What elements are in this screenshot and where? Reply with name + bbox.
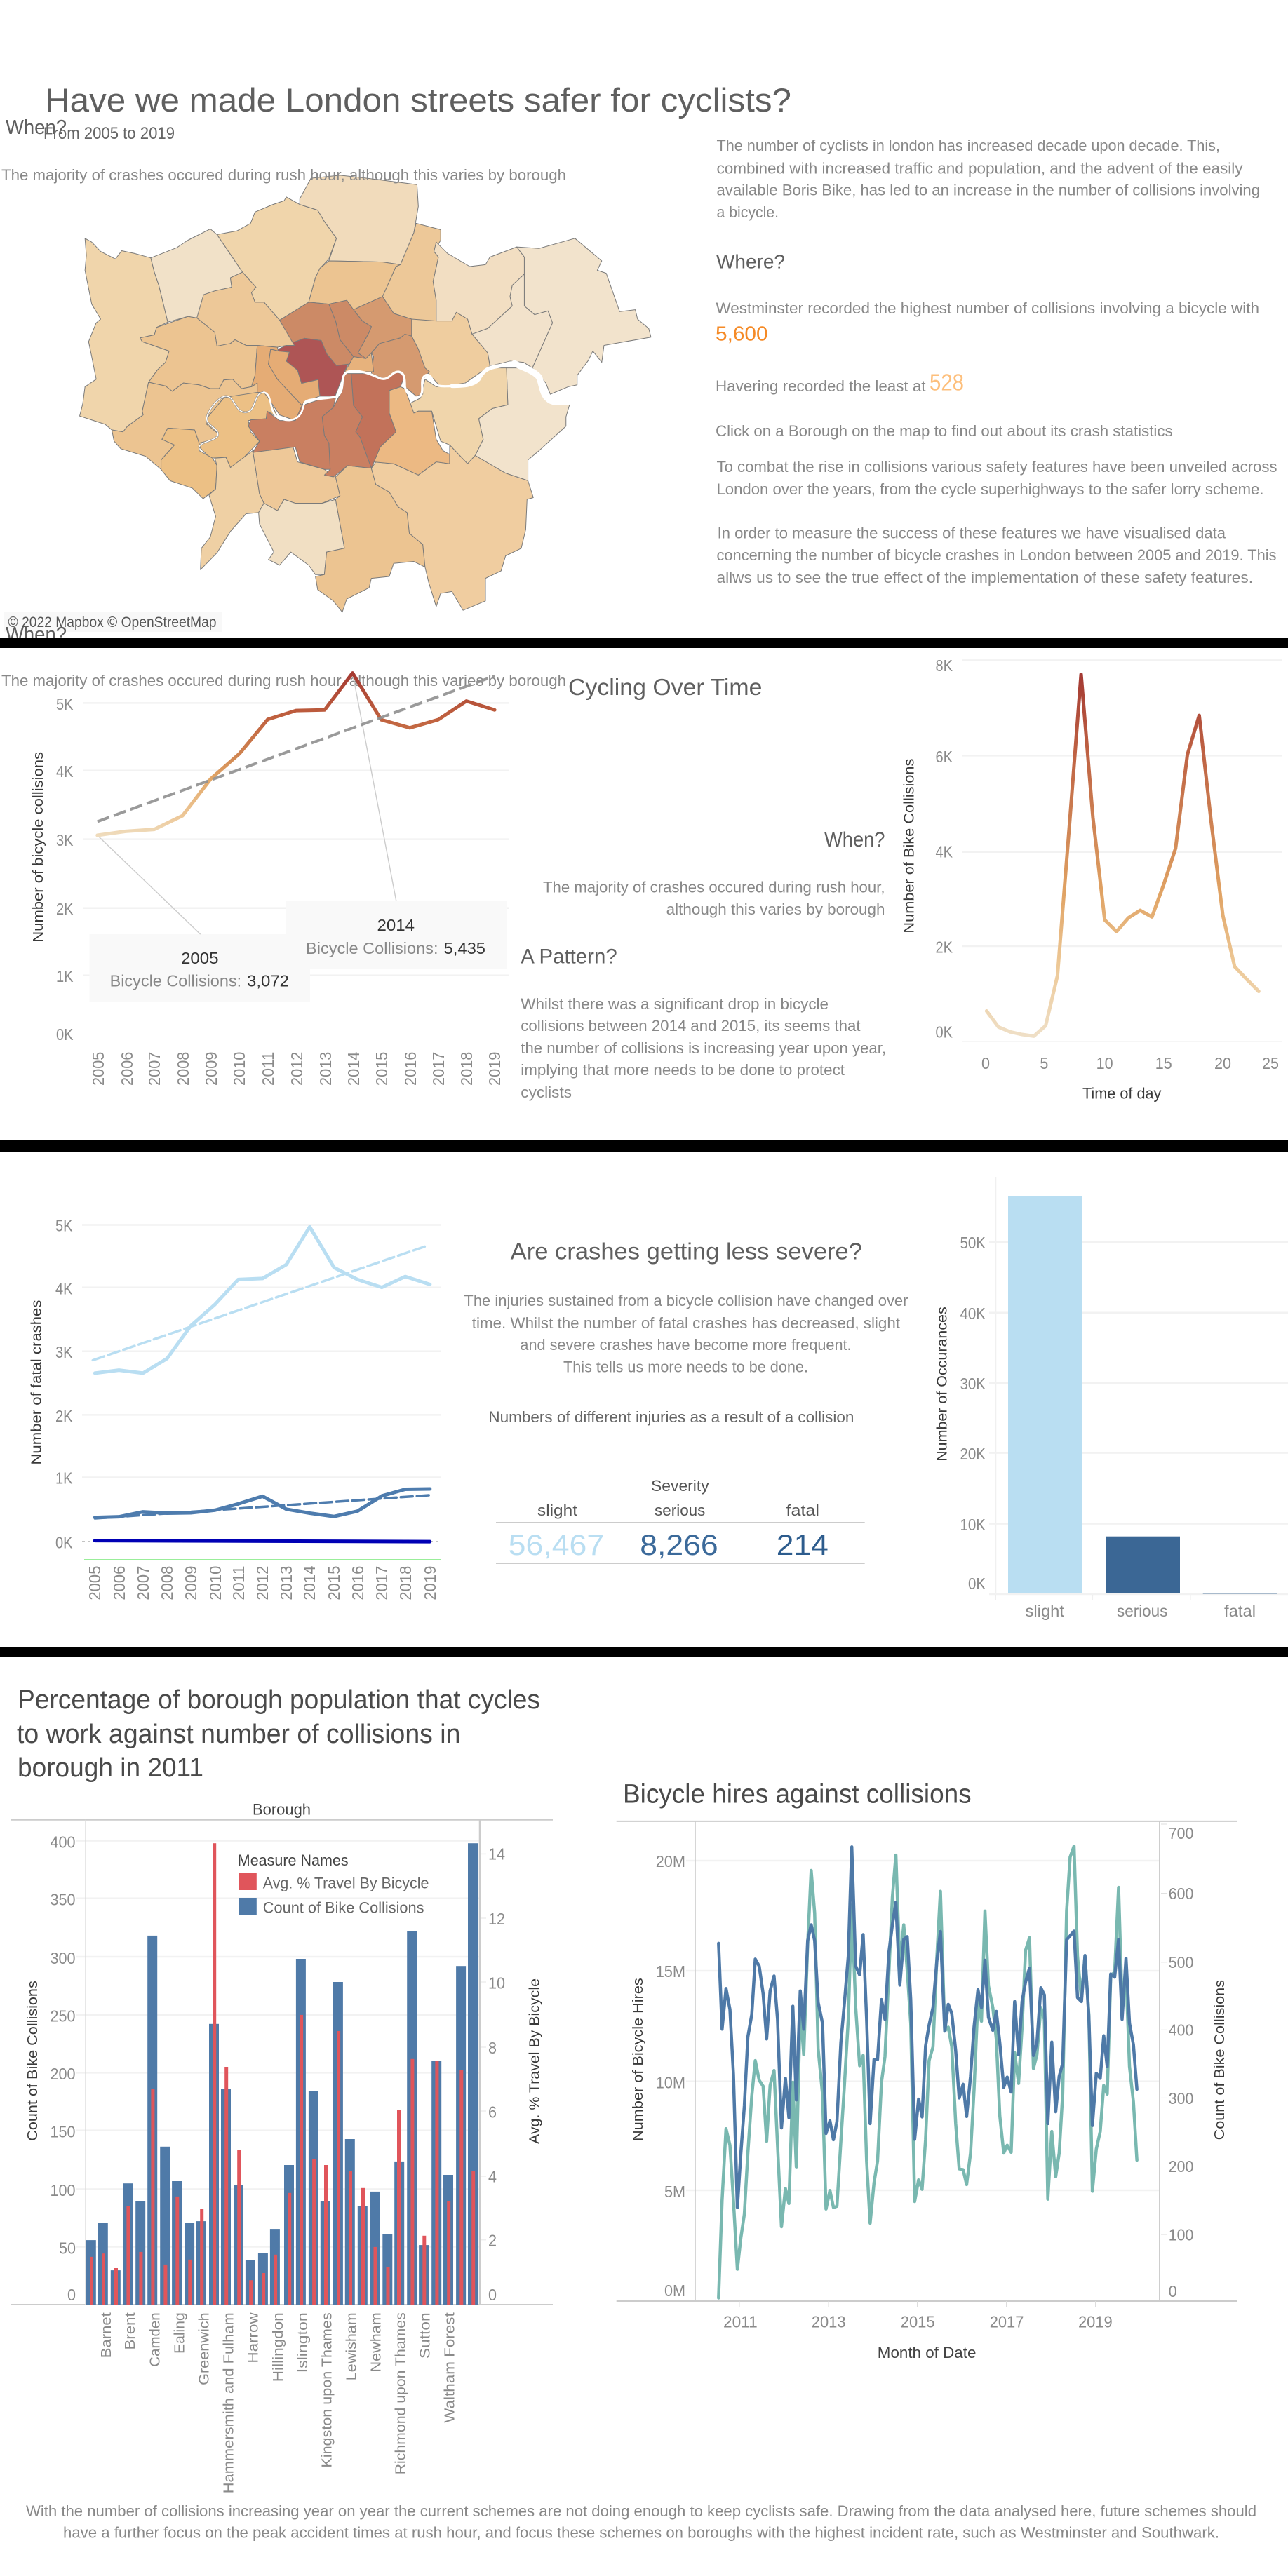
severity table: slight: [537, 1502, 577, 1519]
left y axis labels: 250: [51, 2007, 76, 2025]
y axis labels: 2K: [56, 900, 74, 918]
borough: Enfield: [300, 175, 418, 264]
y axis labels: 4K: [56, 762, 74, 781]
right y axis labels: 400: [1169, 2021, 1193, 2039]
x axis labels: 2019: [421, 1566, 439, 1600]
borough labels: Richmond upon Thames: [394, 2312, 409, 2474]
borough: Southwark: [351, 372, 405, 468]
y axis labels: 5K: [56, 695, 74, 713]
callout: 2014: Bicycle Collisions:: [306, 939, 438, 957]
left y axis labels: 0M: [664, 2281, 685, 2300]
river Thames: [199, 363, 568, 447]
borough labels: Camden: [148, 2312, 163, 2367]
x axis labels: 2011: [723, 2313, 758, 2331]
title: Have we made London streets safer for cyclists?: [45, 81, 791, 119]
right y axis labels: 6: [488, 2103, 497, 2121]
stat: fatal: 214: [777, 1528, 829, 1561]
text: lowest borough: Havering recorded the least at: [716, 377, 926, 395]
y axis title: Number of fatal crashes: [29, 1300, 45, 1465]
y axis labels: 0K: [55, 1533, 73, 1551]
y axis title: Number of Occurances: [934, 1307, 950, 1462]
borough: Islington: [329, 300, 371, 358]
divider 3: [0, 1647, 1288, 1657]
callout: 2005: 3,072: [247, 972, 289, 990]
legend: Measure Names: [238, 1852, 349, 1869]
column title: Borough: [253, 1801, 311, 1819]
x axis labels: 0: [981, 1054, 990, 1072]
borough: Hackney: [354, 297, 412, 358]
borough: Merton: [253, 447, 340, 511]
borough: Greenwich: [410, 368, 508, 464]
right y axis labels: 700: [1169, 1824, 1193, 1842]
borough: City of London: [344, 353, 374, 372]
dual axis bar chart: boroughs: [11, 1801, 553, 2493]
x axis labels: 2019: [1078, 2313, 1113, 2331]
x axis labels: 2015: [901, 2313, 934, 2331]
severity table: serious: [655, 1502, 705, 1519]
x axis labels: 2007: [145, 1052, 163, 1086]
y axis labels: 1K: [55, 1469, 73, 1487]
left y axis labels: 150: [51, 2122, 76, 2140]
intro text block: available Boris Bike, has led to an increase in the number of collisions involving: [717, 182, 1260, 199]
x axis labels: 2010: [206, 1566, 224, 1600]
conclusion text: have a further focus on the peak accident times at rush hour, and focus these schemes on boroughs with the highest incident rate, such as Westminster and Southwark.: [63, 2523, 1219, 2542]
x axis labels: 2018: [457, 1052, 476, 1086]
right y axis title: Avg. % Travel By Bicycle: [528, 1978, 543, 2144]
borough: Kingston upon Thames: [201, 450, 264, 569]
text: severity explanation: and severe crashes have become more frequent.: [520, 1336, 852, 1354]
x axis labels: 2011: [229, 1566, 248, 1600]
borough: Hammersmith and Fulham: [251, 345, 302, 421]
borough labels: Waltham Forest: [442, 2312, 457, 2423]
x axis labels: 20: [1214, 1054, 1231, 1072]
x axis labels: 2014: [344, 1051, 363, 1086]
x axis labels: 2017: [429, 1052, 448, 1086]
right y axis labels: 300: [1169, 2089, 1193, 2108]
borough: Hillingdon: [80, 238, 169, 432]
callout boxes: [90, 901, 507, 1002]
stray heading: When? (cut off by divider): When?: [6, 623, 67, 646]
callout: 2005: Bicycle Collisions:: [110, 972, 241, 990]
y axis labels: 50K: [960, 1234, 986, 1252]
right y axis labels: 14: [488, 1845, 505, 1863]
y axis title: Number of bicycle collisions: [31, 752, 46, 943]
stat: 528: 528: [930, 370, 964, 396]
x axis labels: 2006: [118, 1052, 136, 1086]
callout: 2014: 2014: [377, 916, 415, 934]
text: severity explanation: [464, 1292, 908, 1376]
borough: Harrow: [151, 229, 243, 322]
y axis labels: 40K: [960, 1304, 986, 1323]
x axis labels: 2010: [230, 1052, 248, 1086]
x axis labels: 2019: [485, 1052, 504, 1086]
borough labels: [99, 2312, 457, 2493]
borough labels: Brent: [123, 2312, 138, 2349]
borough: Ealing: [140, 316, 257, 391]
left y axis labels: 300: [51, 1949, 76, 1967]
borough: Bromley: [371, 445, 533, 610]
x axis labels: [1026, 1602, 1256, 1620]
borough: Kensington and Chelsea: [269, 349, 320, 405]
divider 2: [0, 1140, 1288, 1152]
x axis labels: slight: [1026, 1602, 1065, 1620]
heading: Are crashes getting less severe?: Are crashes getting less severe?: [511, 1239, 862, 1264]
borough: Camden: [280, 302, 354, 365]
y axis labels: 6K: [936, 748, 953, 766]
borough labels: Lewisham: [344, 2312, 360, 2380]
borough: Croydon: [316, 466, 425, 612]
borough: Lewisham: [374, 386, 450, 475]
heading: Cycling Over Time: Cycling Over Time: [568, 674, 762, 700]
x axis labels: 2013: [316, 1052, 335, 1086]
bars: [1008, 1196, 1277, 1593]
severity table: fatal: [786, 1502, 819, 1519]
heading: Where?: Where?: [716, 251, 785, 272]
y axis labels: 4K: [55, 1280, 73, 1298]
borough: Waltham Forest: [382, 223, 441, 326]
text: rush hour: although this varies by borough: [666, 901, 885, 918]
red bars: average percent travel by bicycle: [90, 1843, 475, 2305]
severity table: [496, 1477, 865, 1564]
y axis labels: [55, 1216, 73, 1551]
x axis labels: 2015: [373, 1052, 391, 1086]
borough: Bexley: [475, 368, 570, 480]
text: measuring success: allws us to see the true effect of the implementation of these safety features.: [717, 569, 1253, 586]
intro text block: [717, 137, 1260, 221]
line chart: crashes by severity: [29, 1216, 441, 1600]
choropleth map of London boroughs: [80, 175, 651, 612]
y axis labels: 0K: [56, 1025, 74, 1044]
borough labels: Ealing: [173, 2312, 188, 2354]
intro text block: combined with increased traffic and population, and the advent of the easily: [717, 160, 1243, 177]
x axis labels: 2008: [174, 1052, 192, 1086]
text: pattern explanation: the number of collisions is increasing year upon year,: [521, 1039, 886, 1057]
callout: 2014: [306, 916, 485, 957]
borough labels: Barnet: [99, 2312, 114, 2358]
left y axis labels: 10M: [656, 2073, 685, 2091]
text: pattern explanation: Whilst there was a significant drop in bicycle: [521, 995, 829, 1013]
right y axis title: Count of Bike Collisions: [1212, 1980, 1228, 2140]
x axis labels: 2005: [86, 1566, 104, 1600]
callout: 2014: 5,435: [444, 939, 485, 957]
text: measuring success: concerning the number of bicycle crashes in London between 2005 and 2019. This: [717, 546, 1277, 564]
left y axis labels: 50: [59, 2239, 76, 2258]
text: highest borough: Westminster recorded the highest number of collisions involving a bicycle with: [716, 299, 1259, 317]
left y axis labels: 0: [67, 2286, 76, 2304]
right y axis labels: 12: [488, 1910, 505, 1928]
panel: borough and hires: [11, 1685, 1256, 2542]
text: pattern explanation: implying that more needs to be done to protect: [521, 1061, 845, 1079]
x axis labels: 2006: [110, 1566, 128, 1600]
left y axis title: Number of Bicycle Hires: [631, 1978, 646, 2141]
x axis labels: 2009: [182, 1566, 200, 1600]
borough: Wandsworth: [248, 398, 335, 469]
text: safety features: [717, 458, 1277, 498]
x axis labels: 5: [1040, 1054, 1048, 1072]
series lines: slight, serious, fatal with trends: [93, 1227, 430, 1542]
line chart: bicycle collisions by year: [31, 673, 509, 1086]
borough labels: Harrow: [246, 2312, 261, 2363]
y axis labels: 0K: [968, 1574, 986, 1593]
x axis labels: 2012: [288, 1052, 306, 1086]
text: rush hour: The majority of crashes occured during rush hour,: [543, 878, 885, 896]
y axis labels: 5K: [55, 1216, 73, 1234]
x axis labels: 2018: [396, 1566, 415, 1600]
y axis labels: 4K: [936, 843, 953, 861]
text: severity explanation: The injuries sustained from a bicycle collision have changed over: [464, 1292, 908, 1309]
x axis labels: [86, 1565, 439, 1600]
y axis labels: 3K: [55, 1343, 73, 1361]
series: collisions, trend and leader lines: [98, 673, 495, 934]
blue bars: count of bike collisions: [86, 1843, 478, 2305]
left y axis labels: 200: [51, 2065, 76, 2083]
heading: percentage of borough population: [17, 1685, 540, 1783]
stat: 5,600: 5,600: [716, 323, 768, 345]
y axis labels: 0K: [936, 1023, 953, 1041]
line chart: collisions by time of day: [902, 656, 1282, 1102]
left y axis labels: 15M: [656, 1962, 685, 1981]
right y axis labels: 100: [1169, 2226, 1193, 2244]
right y axis labels: 2: [488, 2232, 497, 2250]
borough: Barnet: [217, 197, 337, 321]
left y axis title: Count of Bike Collisions: [25, 1981, 41, 2141]
stray heading: When?: When?: [6, 116, 67, 139]
x axis labels: 2013: [812, 2313, 846, 2331]
text: safety features: London over the years, from the cycle superhighways to the safer lorry scheme.: [717, 480, 1264, 498]
borough: Haringey: [309, 261, 401, 310]
x axis labels: 2012: [253, 1566, 271, 1600]
bar chart: occurrences by severity: [934, 1177, 1288, 1620]
severity table: Severity: [651, 1477, 709, 1495]
borough labels: Newham: [369, 2312, 384, 2372]
y axis labels: 30K: [960, 1375, 986, 1393]
divider 1: [0, 638, 1288, 648]
text: pattern explanation: [521, 995, 886, 1101]
left y axis labels: 350: [51, 1891, 76, 1909]
x axis labels: 2009: [202, 1052, 220, 1086]
y axis labels: [56, 695, 74, 1044]
x axis title: Time of day: [1082, 1085, 1161, 1102]
borough labels: Kingston upon Thames: [320, 2312, 335, 2468]
borough: Newham: [412, 312, 490, 386]
borough: Hounslow: [112, 379, 257, 469]
y axis labels: [960, 1234, 986, 1593]
y axis labels: [936, 656, 953, 1041]
borough labels: Hillingdon: [271, 2312, 286, 2382]
panel: crash severity: [29, 1177, 1288, 1620]
right y axis labels: 8: [488, 2039, 497, 2057]
callout: 2005: 2005: [181, 949, 219, 967]
borough: Tower Hamlets: [371, 334, 429, 396]
borough labels: Greenwich: [196, 2312, 212, 2385]
x axis labels: [89, 1051, 504, 1086]
y axis labels: 2K: [55, 1407, 73, 1425]
borough: Richmond west: [161, 428, 217, 499]
x axis labels: 25: [1262, 1054, 1279, 1072]
legend: Count of Bike Collisions: [263, 1899, 424, 1916]
heading: percentage of borough population: borough in 2011: [18, 1753, 203, 1783]
borough: Brent: [197, 272, 295, 347]
borough: Richmond east: [199, 392, 277, 468]
x axis labels: 2016: [349, 1566, 367, 1600]
stray text: rush hour note: The majority of crashes occured during rush hour, although this varies by borough: [1, 672, 566, 689]
chart frame and grid: [617, 1821, 1237, 2307]
borough labels: Sutton: [418, 2312, 434, 2359]
right y axis labels: 200: [1169, 2157, 1193, 2176]
left y axis labels: 5M: [664, 2183, 685, 2201]
borough: Sutton: [259, 499, 344, 574]
panel: map and introduction: [1, 81, 1277, 646]
panel: cycling over time: [1, 656, 1282, 1102]
right y axis labels: [1169, 1824, 1193, 2300]
y axis labels: 1K: [56, 967, 74, 985]
stray text: rush hour note: The majority of crashes occured during rush hour, although this varies by borough: [1, 166, 566, 184]
heading: percentage of borough population: Percentage of borough population that cycles: [18, 1685, 540, 1715]
intro text block: a bicycle.: [717, 203, 779, 221]
borough labels: Islington: [295, 2312, 311, 2373]
x axis labels: serious: [1117, 1602, 1167, 1620]
y axis title: Number of Bike Collisions: [902, 759, 918, 933]
series lines: bicycle hires (teal), collisions (blue): [718, 1846, 1137, 2298]
y axis labels: 3K: [56, 831, 74, 849]
right y axis labels: 500: [1169, 1953, 1193, 1971]
map attribution: © 2022 Mapbox © OpenStreetMap: [8, 614, 216, 630]
table heading: Numbers of different injuries as a result of a collision: [488, 1408, 854, 1426]
y axis labels: 20K: [960, 1445, 986, 1463]
legend: [238, 1852, 429, 1916]
text: pattern explanation: cyclists: [521, 1084, 572, 1101]
x axis labels: 2016: [401, 1052, 420, 1086]
left y axis labels: [51, 1833, 76, 2304]
stat: slight: 56,467: [509, 1528, 604, 1561]
right y axis labels: 0: [1169, 2282, 1177, 2300]
x axis labels: 2017: [990, 2313, 1024, 2331]
text: pattern explanation: collisions between 2014 and 2015, its seems that: [521, 1017, 860, 1034]
x axis labels: 2005: [89, 1052, 107, 1086]
right y axis labels: 0: [488, 2286, 497, 2304]
chart frame and grid: [11, 1820, 553, 2305]
series: collisions per hour: [986, 674, 1259, 1036]
y axis labels: 10K: [960, 1516, 986, 1534]
borough: Westminster: [279, 338, 348, 396]
x axis title: Month of Date: [878, 2344, 976, 2361]
heading: When?: When?: [824, 828, 885, 851]
borough labels: Hammersmith and Fulham: [222, 2312, 237, 2493]
text: severity explanation: time. Whilst the number of fatal crashes has decreased, slight: [472, 1314, 900, 1332]
subtitle: From 2005 to 2019: [43, 124, 175, 143]
x axis labels: 2015: [325, 1566, 343, 1600]
right y axis labels: [488, 1845, 505, 2304]
x axis labels: 2007: [134, 1566, 152, 1600]
intro text block: The number of cyclists in london has increased decade upon decade. This,: [717, 137, 1220, 154]
right y axis labels: 4: [488, 2168, 497, 2186]
borough: Redbridge: [433, 242, 524, 334]
x axis labels: 2013: [277, 1566, 295, 1600]
x axis labels: 2014: [300, 1565, 318, 1600]
y axis labels: 2K: [936, 938, 953, 957]
x axis labels: 2017: [373, 1566, 391, 1600]
stat: serious: 8,266: [640, 1528, 718, 1561]
right y axis labels: 10: [488, 1974, 505, 1992]
left y axis labels: 100: [51, 2181, 76, 2199]
text: map instruction: Click on a Borough on the map to find out about its crash statistics: [716, 422, 1173, 440]
x axis labels: [723, 2313, 1113, 2331]
conclusion text: [26, 2502, 1256, 2542]
right y axis labels: 600: [1169, 1884, 1193, 1903]
callout: 2005: [110, 949, 289, 990]
text: rush hour: [543, 878, 885, 918]
x axis labels: fatal: [1224, 1602, 1256, 1620]
x axis labels: [981, 1054, 1279, 1072]
text: measuring success: [717, 525, 1277, 586]
y axis labels: 8K: [936, 656, 953, 675]
x axis labels: 2011: [259, 1052, 277, 1086]
x axis labels: 2008: [158, 1566, 176, 1600]
text: measuring success: In order to measure the success of these features we have visualised data: [718, 525, 1226, 542]
heading: A Pattern?: A Pattern?: [521, 945, 617, 968]
x axis labels: 15: [1155, 1054, 1172, 1072]
borough: Lambeth: [322, 374, 371, 477]
text: severity explanation: This tells us more needs to be done.: [563, 1358, 808, 1376]
x axis labels: 10: [1096, 1054, 1113, 1072]
borough: Havering: [517, 238, 651, 394]
text: safety features: To combat the rise in collisions various safety features have been unveiled across: [717, 458, 1277, 476]
left y axis labels: 400: [51, 1833, 76, 1852]
dual axis line chart: hires and collisions: [617, 1821, 1237, 2361]
left y axis labels: [656, 1852, 685, 2300]
borough: Barking and Dagenham: [472, 274, 553, 368]
conclusion text: With the number of collisions increasing year on year the current schemes are not doing enough to keep cyclists safe. Drawing from the data analysed here, future schemes should: [26, 2502, 1256, 2520]
heading: bicycle hires against collisions: Bicycle hires against collisions: [623, 1780, 972, 1809]
left y axis labels: 20M: [656, 1852, 685, 1870]
legend: Avg. % Travel By Bicycle: [263, 1874, 429, 1892]
heading: percentage of borough population: to work against number of collisions in: [17, 1720, 460, 1749]
